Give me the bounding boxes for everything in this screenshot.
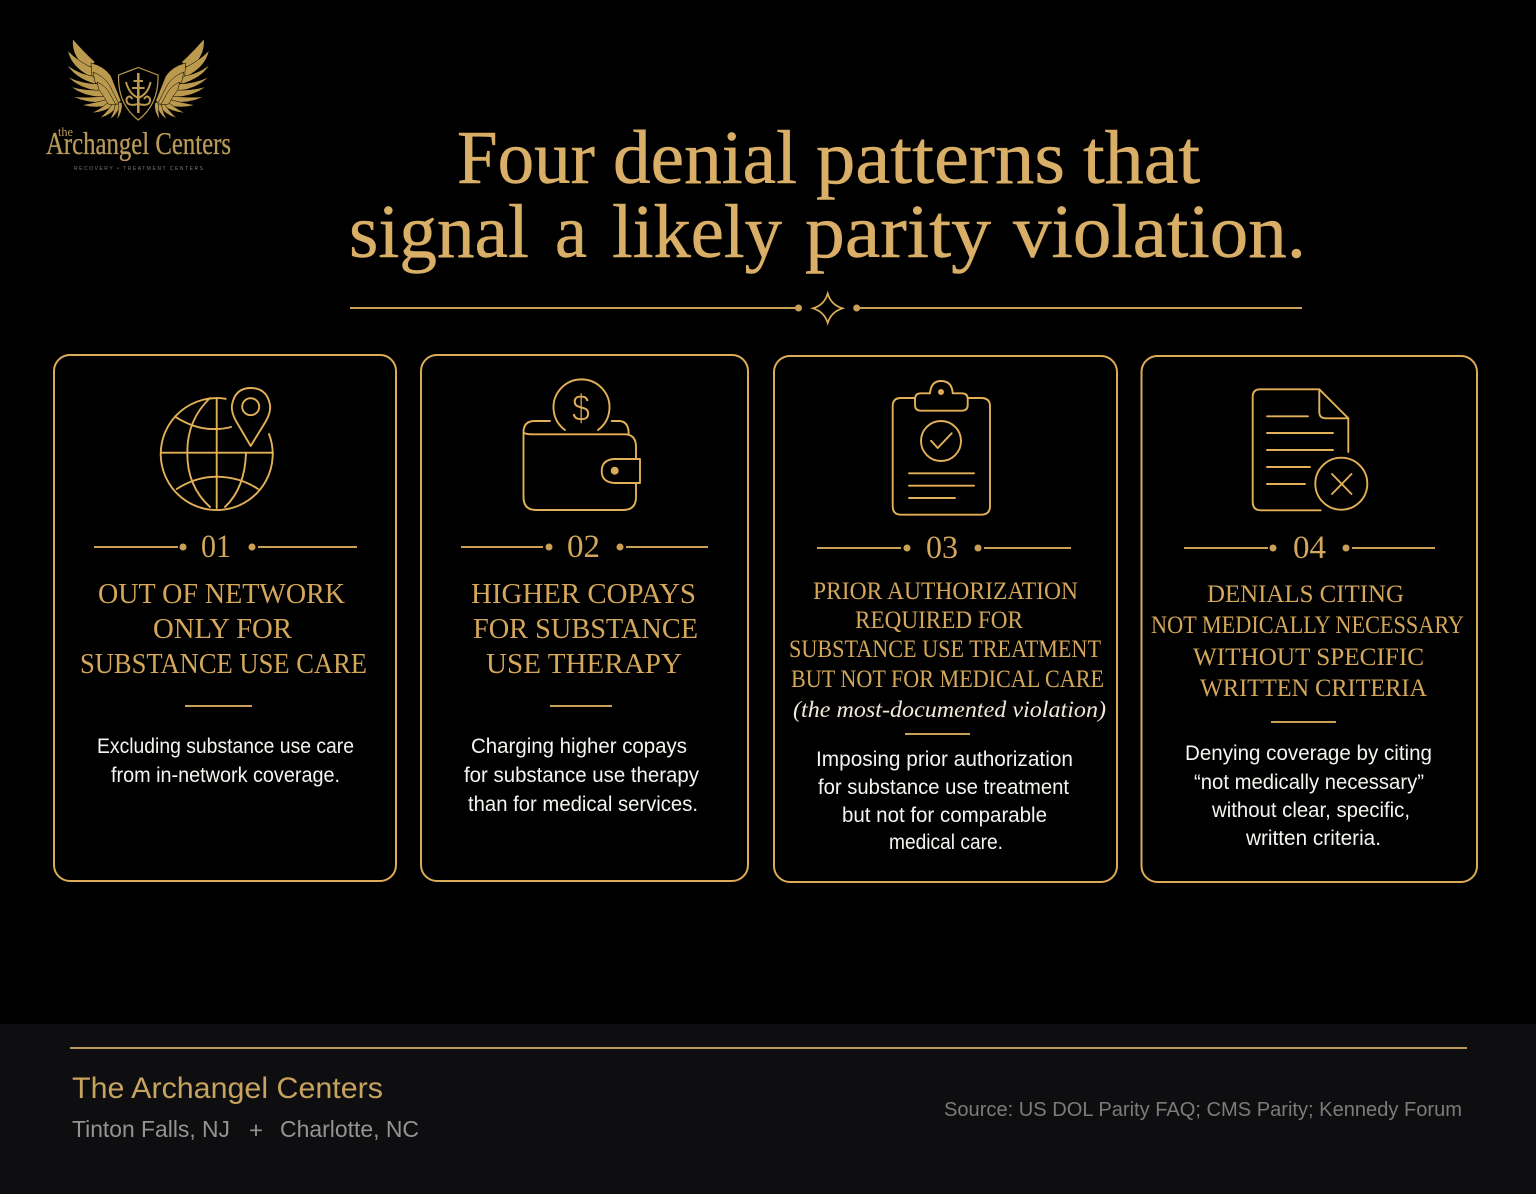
title: Four bbox=[457, 116, 595, 200]
title: parity bbox=[805, 190, 991, 274]
footer locations bbox=[72, 1116, 419, 1143]
title: violation. bbox=[1013, 190, 1306, 274]
body text 03 bbox=[816, 748, 1073, 854]
logo: The Archangel Centers: RECOVERY • TREATMENT CENTERS bbox=[74, 166, 204, 172]
heading 02: HIGHER COPAYS bbox=[471, 579, 696, 610]
logo: The Archangel Centers bbox=[46, 39, 231, 172]
body text 03: Imposing prior authorization bbox=[816, 748, 1073, 771]
icon: globe with location pin bbox=[161, 388, 273, 510]
body text 04: written criteria. bbox=[1245, 827, 1381, 850]
number 01 bbox=[94, 529, 357, 565]
fleur ornament bbox=[126, 73, 151, 113]
logo: The Archangel Centers: Archangel Centers bbox=[46, 125, 231, 161]
body text 01: from in-network coverage. bbox=[111, 764, 340, 787]
heading 03 bbox=[789, 576, 1106, 722]
heading 01: ONLY FOR bbox=[153, 614, 292, 645]
heading 02: FOR SUBSTANCE bbox=[473, 614, 698, 645]
title bbox=[349, 116, 1306, 274]
footer locations: Charlotte, NC bbox=[280, 1116, 419, 1142]
footer locations: Tinton Falls, NJ bbox=[72, 1116, 230, 1142]
body text 01: Excluding substance use care bbox=[97, 735, 354, 758]
panel: card 01 out of network bbox=[54, 355, 396, 881]
body text 04: without clear, specific, bbox=[1211, 799, 1410, 822]
number 04: 04 bbox=[1293, 530, 1326, 566]
body text 02 bbox=[464, 735, 699, 816]
logo wordmark: the bbox=[58, 124, 73, 139]
body text 03: but not for comparable bbox=[842, 804, 1047, 827]
heading 03: BUT NOT FOR MEDICAL CARE bbox=[791, 664, 1104, 693]
body text 01 bbox=[97, 735, 354, 787]
heading 03: SUBSTANCE USE TREATMENT bbox=[789, 634, 1101, 663]
icon: wallet with dollar coin bbox=[524, 379, 640, 510]
icon: winged shield bbox=[67, 39, 209, 120]
body text 03: for substance use treatment bbox=[818, 776, 1069, 799]
source note: Source: US DOL Parity FAQ; CMS Parity; Kennedy Forum bbox=[944, 1099, 1462, 1121]
heading 03: PRIOR AUTHORIZATION bbox=[813, 576, 1078, 605]
heading 01 bbox=[80, 579, 367, 680]
title: that bbox=[1083, 116, 1200, 200]
title: a bbox=[555, 190, 587, 274]
title divider with diamond bbox=[350, 294, 1302, 323]
heading 04: WITHOUT SPECIFIC bbox=[1193, 642, 1424, 671]
body text 02: Charging higher copays bbox=[471, 735, 687, 758]
heading 02 bbox=[471, 579, 698, 680]
footer band bbox=[0, 1024, 1536, 1194]
heading 01: SUBSTANCE USE CARE bbox=[80, 649, 367, 680]
body text 04 bbox=[1185, 742, 1432, 850]
title: denial bbox=[613, 116, 797, 200]
panel: card 02 higher copays bbox=[421, 355, 748, 881]
shield bbox=[119, 68, 158, 120]
title: patterns bbox=[816, 116, 1065, 200]
body text 04: “not medically necessary” bbox=[1194, 771, 1424, 794]
title: likely bbox=[612, 190, 782, 274]
heading 03: (the most-documented violation) bbox=[793, 697, 1106, 722]
icon: document with x mark bbox=[1253, 389, 1367, 510]
number 03 bbox=[817, 530, 1071, 566]
heading 04: NOT MEDICALLY NECESSARY bbox=[1151, 610, 1464, 639]
number 02: 02 bbox=[567, 529, 600, 565]
number 02 bbox=[461, 529, 708, 565]
heading 04: DENIALS CITING bbox=[1207, 579, 1404, 608]
heading 04: WRITTEN CRITERIA bbox=[1200, 673, 1428, 702]
number 01: 01 bbox=[201, 529, 231, 565]
body text 03: medical care. bbox=[889, 831, 1003, 854]
heading 01: OUT OF NETWORK bbox=[98, 579, 345, 610]
footer organisation name: The Archangel Centers bbox=[72, 1072, 383, 1105]
heading 04 bbox=[1151, 579, 1464, 702]
heading 03: REQUIRED FOR bbox=[855, 605, 1023, 634]
icon: clipboard with check bbox=[893, 381, 990, 515]
icon: wallet with dollar coin: $ bbox=[572, 388, 590, 430]
heading 02: USE THERAPY bbox=[486, 649, 682, 680]
panel: card 04 denials citing bbox=[1142, 356, 1477, 882]
body text 02: than for medical services. bbox=[468, 793, 698, 816]
body text 04: Denying coverage by citing bbox=[1185, 742, 1432, 765]
footer locations: + bbox=[249, 1117, 263, 1143]
title: signal bbox=[349, 190, 529, 274]
number 03: 03 bbox=[926, 530, 958, 566]
body text 02: for substance use therapy bbox=[464, 764, 699, 787]
panel: card 03 prior authorization bbox=[774, 356, 1117, 882]
number 04 bbox=[1184, 530, 1435, 566]
